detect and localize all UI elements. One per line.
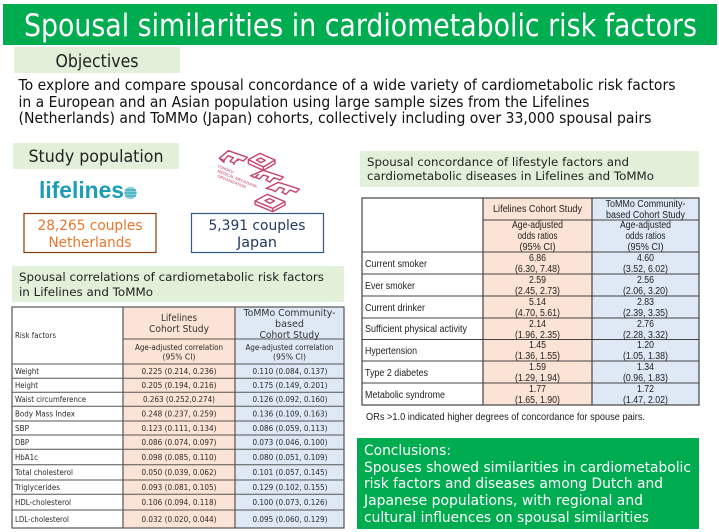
table: spousal concordance: 1.20	[637, 340, 654, 351]
heading: study population	[13, 143, 179, 169]
table: spousal correlations: 0.080 (0.051, 0.109)	[252, 453, 328, 462]
table: spousal correlations: Waist circumference	[15, 395, 86, 404]
table: spousal correlations: (95% CI)	[273, 352, 306, 362]
table: spousal correlations: Cohort Study	[149, 324, 209, 335]
table: spousal concordance: (1.29, 1.94)	[515, 373, 560, 384]
table: spousal concordance: (1.05, 1.38)	[623, 351, 668, 362]
table: spousal correlations: (95% CI)	[162, 352, 196, 362]
callout: Netherlands couples	[24, 214, 156, 252]
table: spousal concordance: 6.86	[529, 253, 546, 264]
table: spousal correlations: 0.123 (0.111, 0.134)	[142, 424, 216, 433]
panel: conclusions: Spouses showed similarities in cardiometabolic	[364, 460, 691, 476]
table: spousal correlations	[12, 307, 344, 528]
table: spousal concordance: (2.45, 2.73)	[515, 286, 560, 297]
table: spousal correlations: Age-adjusted correlation	[135, 343, 223, 352]
table: spousal correlations: 0.263 (0.252,0.274)	[143, 395, 215, 404]
text: ToMMo logo wording: MEDICAL MEGABANK	[217, 168, 258, 189]
table: spousal correlations: Height	[15, 381, 38, 390]
callout: Japan couples	[192, 214, 324, 252]
table: spousal correlations: based	[275, 319, 304, 330]
table: spousal correlations: 0.095 (0.060, 0.129)	[252, 515, 328, 524]
table: spousal concordance: 2.83	[637, 297, 654, 308]
table: spousal concordance: based Cohort Study	[606, 210, 685, 221]
table: spousal concordance: 1.77	[529, 384, 546, 395]
text block: objectives: (Netherlands) and ToMMo (Japan) cohorts, collectively including over 33,000 spousal pairs	[18, 109, 652, 127]
table: spousal correlations: Weight	[15, 367, 39, 376]
text: ToMMo logo wording: ORGANIZATION	[217, 173, 247, 189]
table: spousal correlations: Total cholesterol	[14, 468, 73, 477]
table: spousal correlations: 0.086 (0.059, 0.113)	[252, 424, 328, 433]
table: spousal concordance: (1.47, 2.02)	[623, 395, 668, 406]
text block: objectives	[18, 76, 675, 127]
table: spousal correlations: 0.100 (0.073, 0.126)	[252, 498, 328, 507]
table: spousal concordance: Current smoker	[365, 259, 428, 270]
table: spousal correlations: ToMMo Community-	[243, 308, 336, 319]
panel: conclusions	[357, 438, 699, 529]
table: spousal concordance: (1.96, 2.35)	[515, 330, 560, 341]
heading: objectives: Objectives	[56, 52, 138, 72]
table: spousal concordance: 4.60	[637, 253, 654, 264]
heading: spousal correlations	[12, 266, 344, 302]
table: spousal correlations: HbA1c	[15, 453, 38, 462]
table: spousal concordance: Lifelines Cohort Study	[493, 204, 582, 215]
table: spousal correlations: 0.205 (0.194, 0.216)	[142, 381, 216, 390]
table: spousal concordance: Metabolic syndrome	[365, 390, 445, 401]
table: spousal concordance: odds ratios	[518, 231, 558, 242]
table: spousal correlations: Triglycerides	[14, 483, 60, 492]
table: spousal correlations: LDL-cholesterol	[15, 515, 69, 524]
table: spousal concordance: Ever smoker	[365, 281, 416, 292]
table: spousal concordance: Age-adjusted	[620, 220, 671, 231]
table: spousal correlations: 0.093 (0.081, 0.105)	[142, 483, 216, 492]
panel: conclusions: Japanese populations, with regional and	[363, 493, 643, 509]
table: spousal concordance: 2.14	[529, 319, 546, 330]
table: spousal concordance: 2.76	[637, 319, 654, 330]
table: spousal concordance: 1.59	[529, 362, 546, 373]
heading: spousal concordance: cardiometabolic diseases in Lifelines and ToMMo	[367, 169, 654, 183]
table: spousal correlations: 0.101 (0.057, 0.145)	[252, 468, 328, 477]
callout: Netherlands couples: Netherlands	[48, 235, 132, 251]
table: spousal correlations: 0.248 (0.237, 0.259)	[142, 410, 216, 418]
text: ToMMo logo wording: TOHOKU	[217, 163, 235, 174]
table: spousal concordance: Current drinker	[365, 303, 426, 314]
table: spousal correlations: 0.225 (0.214, 0.236)	[142, 367, 216, 376]
table: spousal concordance: ToMMo Community-	[606, 199, 686, 210]
table: spousal correlations: HDL-cholesterol	[15, 498, 71, 507]
table: spousal concordance	[362, 198, 699, 406]
panel: conclusions: cultural influences on spousal similarities	[364, 510, 649, 526]
panel: conclusions: Conclusions:	[364, 443, 451, 459]
table: spousal concordance: 5.14	[529, 297, 546, 308]
heading: spousal correlations: Spousal correlations of cardiometabolic risk factors	[19, 270, 324, 284]
table: spousal concordance: (1.65, 1.90)	[515, 395, 560, 406]
text block: odds ratio note: ORs >1.0 indicated higher degrees of concordance for spouse pairs.	[366, 411, 645, 423]
heading: spousal correlations: in Lifelines and ToMMo	[19, 285, 153, 299]
table: spousal concordance: 2.59	[529, 275, 546, 286]
table: spousal concordance: Sufficient physical activity	[365, 324, 467, 335]
table: spousal correlations: Risk factors	[15, 331, 56, 340]
table: spousal concordance: odds ratios	[626, 231, 666, 242]
table: spousal correlations: DBP	[15, 438, 29, 447]
icon: lifelines logo: lifelines	[39, 177, 124, 203]
table: spousal concordance: (95% CI)	[520, 242, 556, 253]
table: spousal concordance: (2.06, 3.20)	[623, 286, 668, 297]
table: spousal correlations: 0.086 (0.074, 0.097)	[142, 438, 216, 447]
table: spousal concordance: Hypertension	[365, 346, 417, 357]
table: spousal correlations: 0.106 (0.094, 0.118)	[142, 498, 216, 507]
table: spousal correlations: 0.050 (0.039, 0.062)	[142, 468, 216, 477]
table: spousal correlations: Age-adjusted correlation	[246, 343, 334, 352]
table: spousal correlations: 0.110 (0.084, 0.137)	[252, 367, 328, 376]
table: spousal correlations: 0.032 (0.020, 0.044)	[142, 515, 216, 524]
callout: Japan couples: Japan	[236, 235, 277, 251]
table: spousal concordance: (2.28, 3.32)	[623, 330, 668, 341]
table: spousal concordance: Age-adjusted	[512, 220, 563, 231]
table: spousal concordance: (4.70, 5.61)	[515, 308, 560, 319]
table: spousal concordance: (6.30, 7.48)	[515, 264, 560, 275]
table: spousal correlations: Cohort Study	[260, 330, 320, 341]
table: spousal correlations: 0.129 (0.102, 0.155)	[252, 483, 328, 492]
table: spousal concordance: (3.52, 6.02)	[623, 264, 668, 275]
heading: spousal concordance: Spousal concordance of lifestyle factors and	[367, 155, 629, 169]
table: spousal concordance: (2.39, 3.35)	[623, 308, 668, 319]
table: spousal concordance: 1.34	[637, 362, 654, 373]
table: spousal concordance: (95% CI)	[628, 242, 664, 253]
callout: Netherlands couples: 28,265 couples	[38, 218, 142, 234]
table: spousal correlations: Lifelines	[161, 313, 197, 324]
table: spousal correlations: 0.126 (0.092, 0.160)	[252, 395, 328, 404]
heading: spousal concordance	[360, 151, 699, 187]
table: spousal correlations: 0.136 (0.109, 0.163)	[252, 410, 328, 418]
table: spousal concordance: (0.96, 1.83)	[623, 373, 668, 384]
table: spousal correlations: 0.073 (0.046, 0.100)	[252, 438, 328, 447]
table: spousal concordance: 2.56	[637, 275, 654, 286]
table: spousal correlations: Body Mass Index	[15, 410, 75, 418]
callout: Japan couples: 5,391 couples	[208, 218, 306, 234]
panel: conclusions: risk factors and diseases among Dutch and	[364, 476, 663, 492]
table: spousal concordance: 1.72	[637, 384, 654, 395]
icon: ToMMo logo	[219, 151, 299, 212]
table: spousal correlations: 0.175 (0.149, 0.201)	[252, 381, 328, 390]
table: spousal concordance: (1.36, 1.55)	[515, 351, 560, 362]
heading: study population: Study population	[28, 147, 164, 167]
table: spousal concordance: 1.45	[529, 340, 546, 351]
table: spousal correlations: 0.098 (0.085, 0.110)	[142, 453, 216, 462]
table: spousal correlations: SBP	[15, 424, 29, 433]
text block: objectives: in a European and an Asian population using large sample sizes from the Lifelines	[18, 93, 590, 111]
heading: objectives	[14, 47, 180, 73]
table: spousal concordance: Type 2 diabetes	[365, 368, 428, 379]
